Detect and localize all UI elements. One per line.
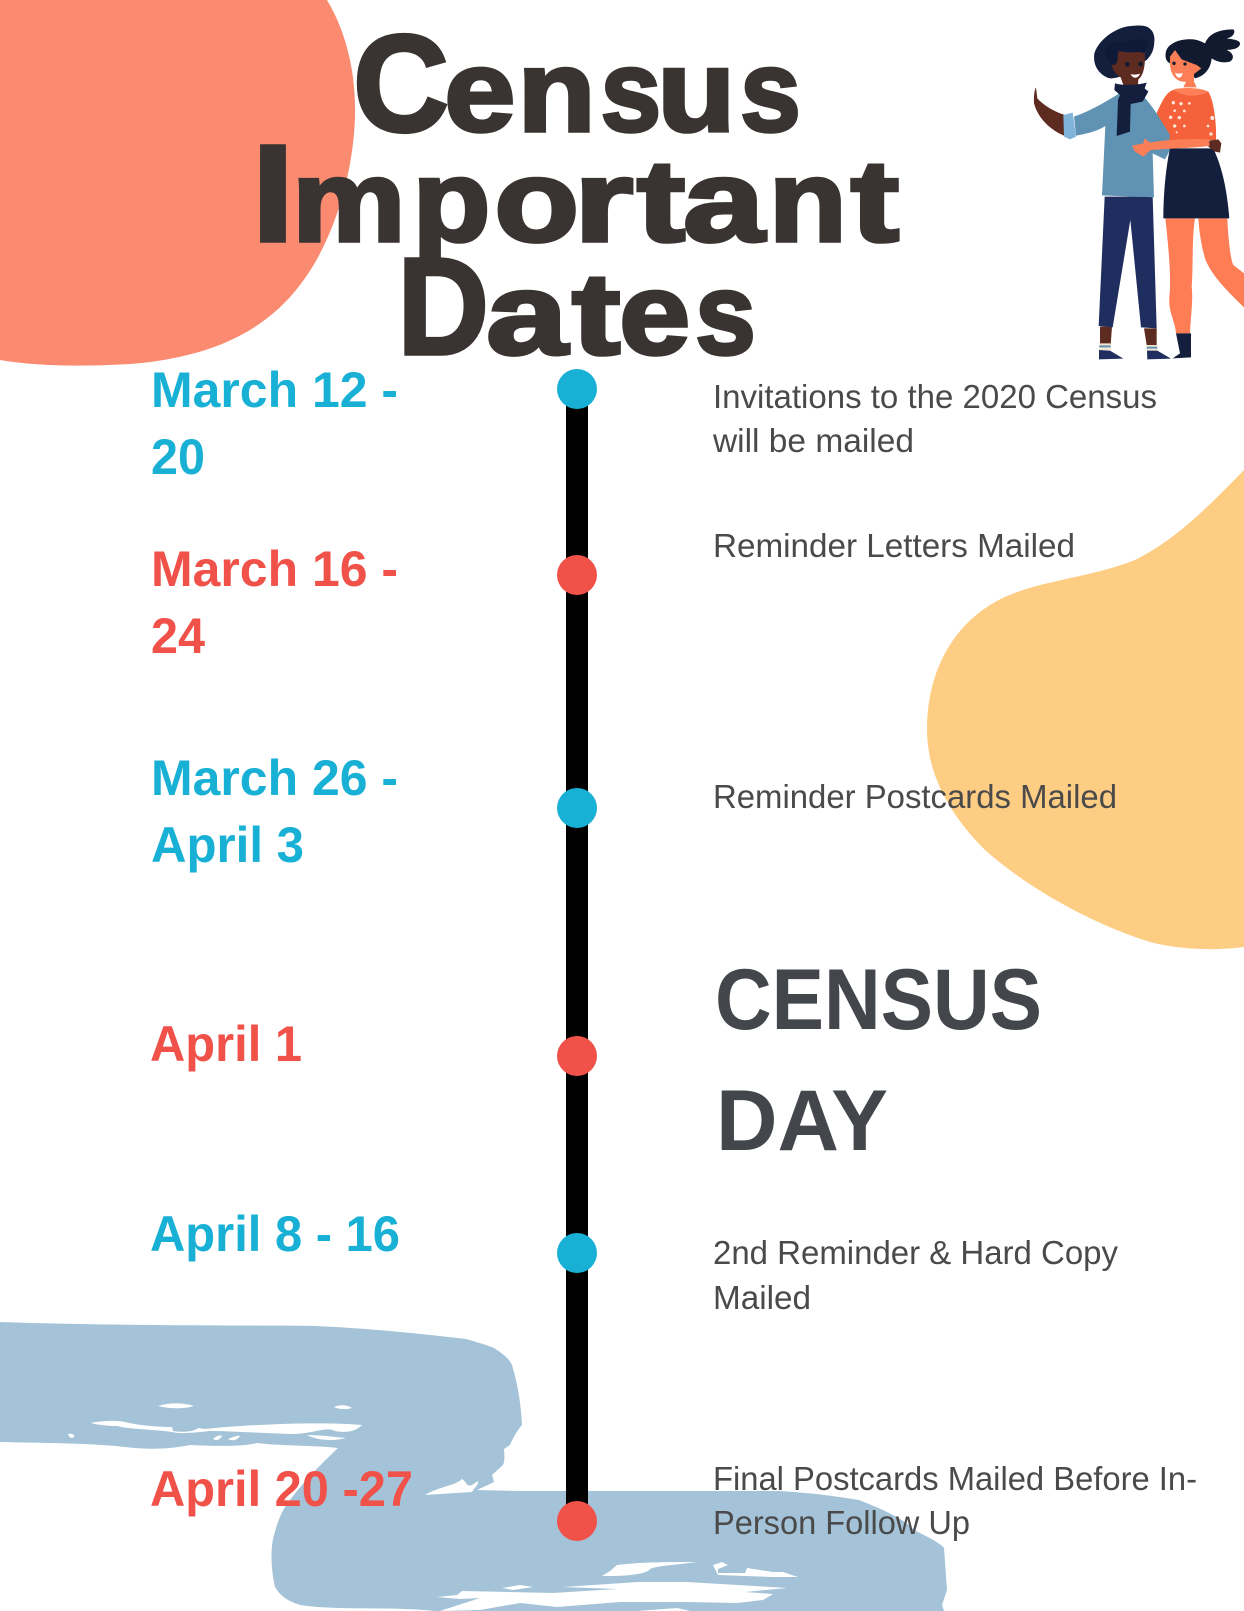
date: March 12-20 xyxy=(151,362,398,485)
event: reminder postcards: Reminder Postcards Mailed xyxy=(713,778,1117,815)
title xyxy=(252,6,899,383)
date: April 8-16: April 8 - 16 xyxy=(150,1206,400,1262)
background blob: coral xyxy=(0,0,355,366)
event: second reminder xyxy=(713,1234,1118,1316)
title: Dates xyxy=(398,229,756,383)
event: census day xyxy=(715,952,1042,1169)
illustration: couple xyxy=(1034,26,1244,359)
date: March 12-20: March 12 - xyxy=(151,362,398,418)
event: invitations: will be mailed xyxy=(712,422,914,459)
event: census day: DAY xyxy=(716,1073,888,1169)
event: second reminder: Mailed xyxy=(713,1279,811,1316)
event: final postcards: Final Postcards Mailed Before In- xyxy=(713,1460,1197,1497)
date: March 12-20: 20 xyxy=(151,429,205,485)
timeline line xyxy=(566,390,588,1515)
date: March 16-24: 24 xyxy=(151,608,205,664)
background blob: yellow xyxy=(927,470,1244,949)
title: Important xyxy=(252,116,899,270)
date: March 16-24 xyxy=(151,541,398,664)
figure: woman xyxy=(1132,29,1244,358)
timeline dots xyxy=(557,369,597,1541)
date: March 26 - April 3: April 3 xyxy=(151,817,304,873)
event: reminder letters: Reminder Letters Mailed xyxy=(713,527,1075,564)
event: final postcards xyxy=(713,1460,1197,1541)
event: invitations xyxy=(712,378,1157,459)
title: Census xyxy=(353,6,801,160)
event: final postcards: Person Follow Up xyxy=(713,1504,970,1541)
date: March 16-24: March 16 - xyxy=(151,541,398,597)
date: April 20-27: April 20 -27 xyxy=(150,1461,413,1517)
background brush stroke: blue xyxy=(0,1322,947,1611)
date: March 26 - April 3 xyxy=(151,750,398,873)
event: second reminder: 2nd Reminder & Hard Copy xyxy=(713,1234,1118,1271)
date: April 1: April 1 xyxy=(150,1016,302,1072)
figure: man xyxy=(1034,26,1171,359)
event: census day: CENSUS xyxy=(715,952,1042,1048)
event: invitations: Invitations to the 2020 Census xyxy=(713,378,1157,415)
date: March 26 - April 3: March 26 - xyxy=(151,750,398,806)
